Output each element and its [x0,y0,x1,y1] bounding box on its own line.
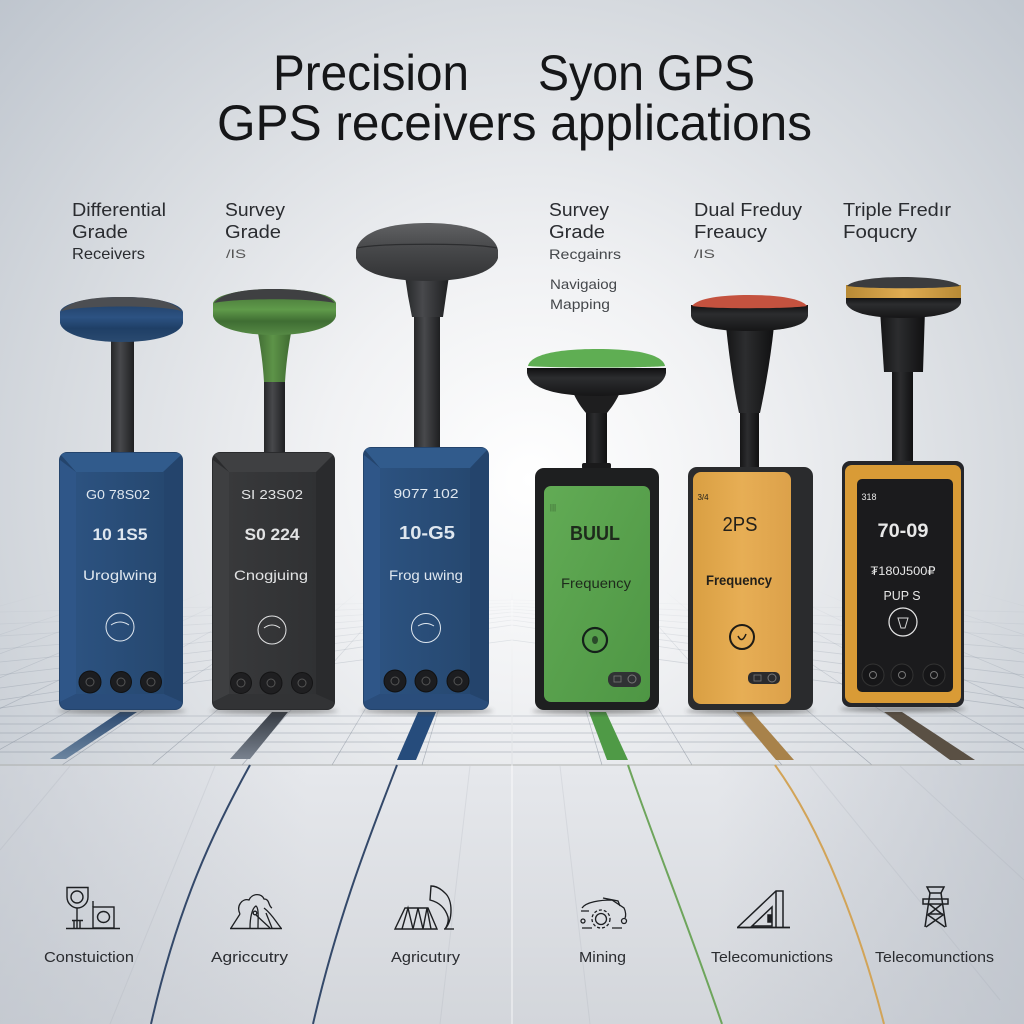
floor strip: dark brown [884,712,975,760]
screen text: S0 224 [244,525,300,544]
label: agriculture 2: Agricutıry [391,950,461,966]
label: construction: Constuiction [44,950,134,966]
screen text [550,503,631,591]
screen text [861,492,936,603]
screen text: 10 1S5 [92,525,148,544]
antenna [356,223,498,449]
icon: tree agriculture [230,895,282,928]
curve: green [628,765,722,1024]
heading: survey grade navigation mapping: Grade [549,222,605,242]
curve: gold [775,765,884,1024]
buttons [230,672,312,694]
screen text: 318 [861,492,877,502]
centre divider [511,600,513,1024]
status dial [730,625,754,649]
icon: tent agriculture [395,886,454,929]
connector port [608,672,641,687]
receiver 4: green [527,349,666,714]
screen text [389,486,463,583]
icon: slope [737,891,790,928]
floor grid [0,590,1024,765]
heading: survey grade navigation mapping: Survey [549,200,609,220]
heading: dual frequency [694,200,802,261]
heading: dual frequency: Dual Freduy [694,200,802,220]
lower band [0,766,1024,1024]
floor strip: brown [736,712,794,760]
receiver 3: blue tall [356,223,498,714]
screen text: SI 23S02 [241,487,303,502]
icon: mining [581,898,626,928]
screen text: ₮180J500₽ [870,564,936,578]
title: Precision [273,45,469,101]
heading: differential grade receivers: Differential [72,200,166,220]
label: agriculture 1: Agriccutry [211,950,289,966]
curve: blue 1 [151,765,250,1024]
receiver 2: dark survey [210,289,338,714]
status dial [412,614,440,642]
status dial [889,608,917,636]
screen text: Frequency [561,575,631,591]
heading: dual frequency: /IS [694,247,715,261]
antenna [691,295,808,470]
heading: survey grade: Grade [225,222,281,242]
heading: differential grade receivers [72,200,166,263]
heading: survey grade navigation mapping [549,200,621,312]
floor strip: navy [397,712,436,760]
heading: survey grade [225,200,285,261]
receiver 6: amber triple [840,277,966,712]
heading: survey grade navigation mapping: Recgainrs [549,246,621,262]
heading: dual frequency: Freaucy [694,222,767,242]
body [361,447,493,714]
screen text: Frequency [706,572,772,588]
heading: survey grade navigation mapping: Navigaiog [550,276,617,292]
screen text: Uroglwing [83,567,157,583]
screen text: 9077 102 [394,486,458,501]
status dial [258,616,286,644]
screen text [697,493,772,588]
antenna [527,349,666,469]
antenna [846,277,961,462]
buttons [79,671,162,693]
floor strip: blue [50,712,137,759]
heading: differential grade receivers: Receivers [72,246,145,263]
body [210,452,338,714]
screen text: 10-G5 [399,523,455,543]
body [840,461,966,712]
screen text: BUUL [570,523,620,545]
icon: tower [923,887,948,927]
antenna [213,289,336,454]
buttons [384,670,469,692]
screen text: 70-09 [878,521,928,542]
screen text: Cnogjuing [234,567,308,583]
buttons [862,664,945,686]
heading: survey grade: /IS [226,247,246,261]
screen text: ||| [550,503,556,512]
label: telecommunications 1: Telecomunictions [711,950,833,966]
screen text: PUP S [884,588,921,603]
status dial [583,628,607,652]
screen text: 2PS [722,514,758,536]
screen text: Frog uwing [389,567,463,583]
floor strip: green [589,712,628,760]
floor strip: dark [230,712,288,759]
receiver 1: blue differential [58,297,186,714]
heading: survey grade: Survey [225,200,285,220]
screen text: 3/4 [697,493,709,502]
icon: construction [66,888,120,928]
heading: survey grade navigation mapping: Mapping [550,296,610,312]
heading: triple frequency: Triple Fredır [843,200,951,220]
title: Syon GPS [538,45,755,101]
body [532,468,660,714]
label: telecommunications 2: Telecomunctions [875,950,994,966]
screen text: G0 78S02 [86,487,150,502]
heading: triple frequency: Foqucry [843,222,917,242]
body [58,452,186,714]
screen text [83,487,157,583]
receiver 5: amber dual [686,295,814,714]
title: GPS receivers applications [217,95,812,151]
status dial [106,613,134,641]
heading: differential grade receivers: Grade [72,222,128,242]
antenna [60,297,183,453]
label: mining: Mining [579,950,626,966]
screen text [234,487,308,583]
curve: blue 2 [313,765,397,1024]
heading: triple frequency [843,200,951,242]
body [686,467,814,714]
title [217,45,812,151]
connector port [748,672,780,684]
